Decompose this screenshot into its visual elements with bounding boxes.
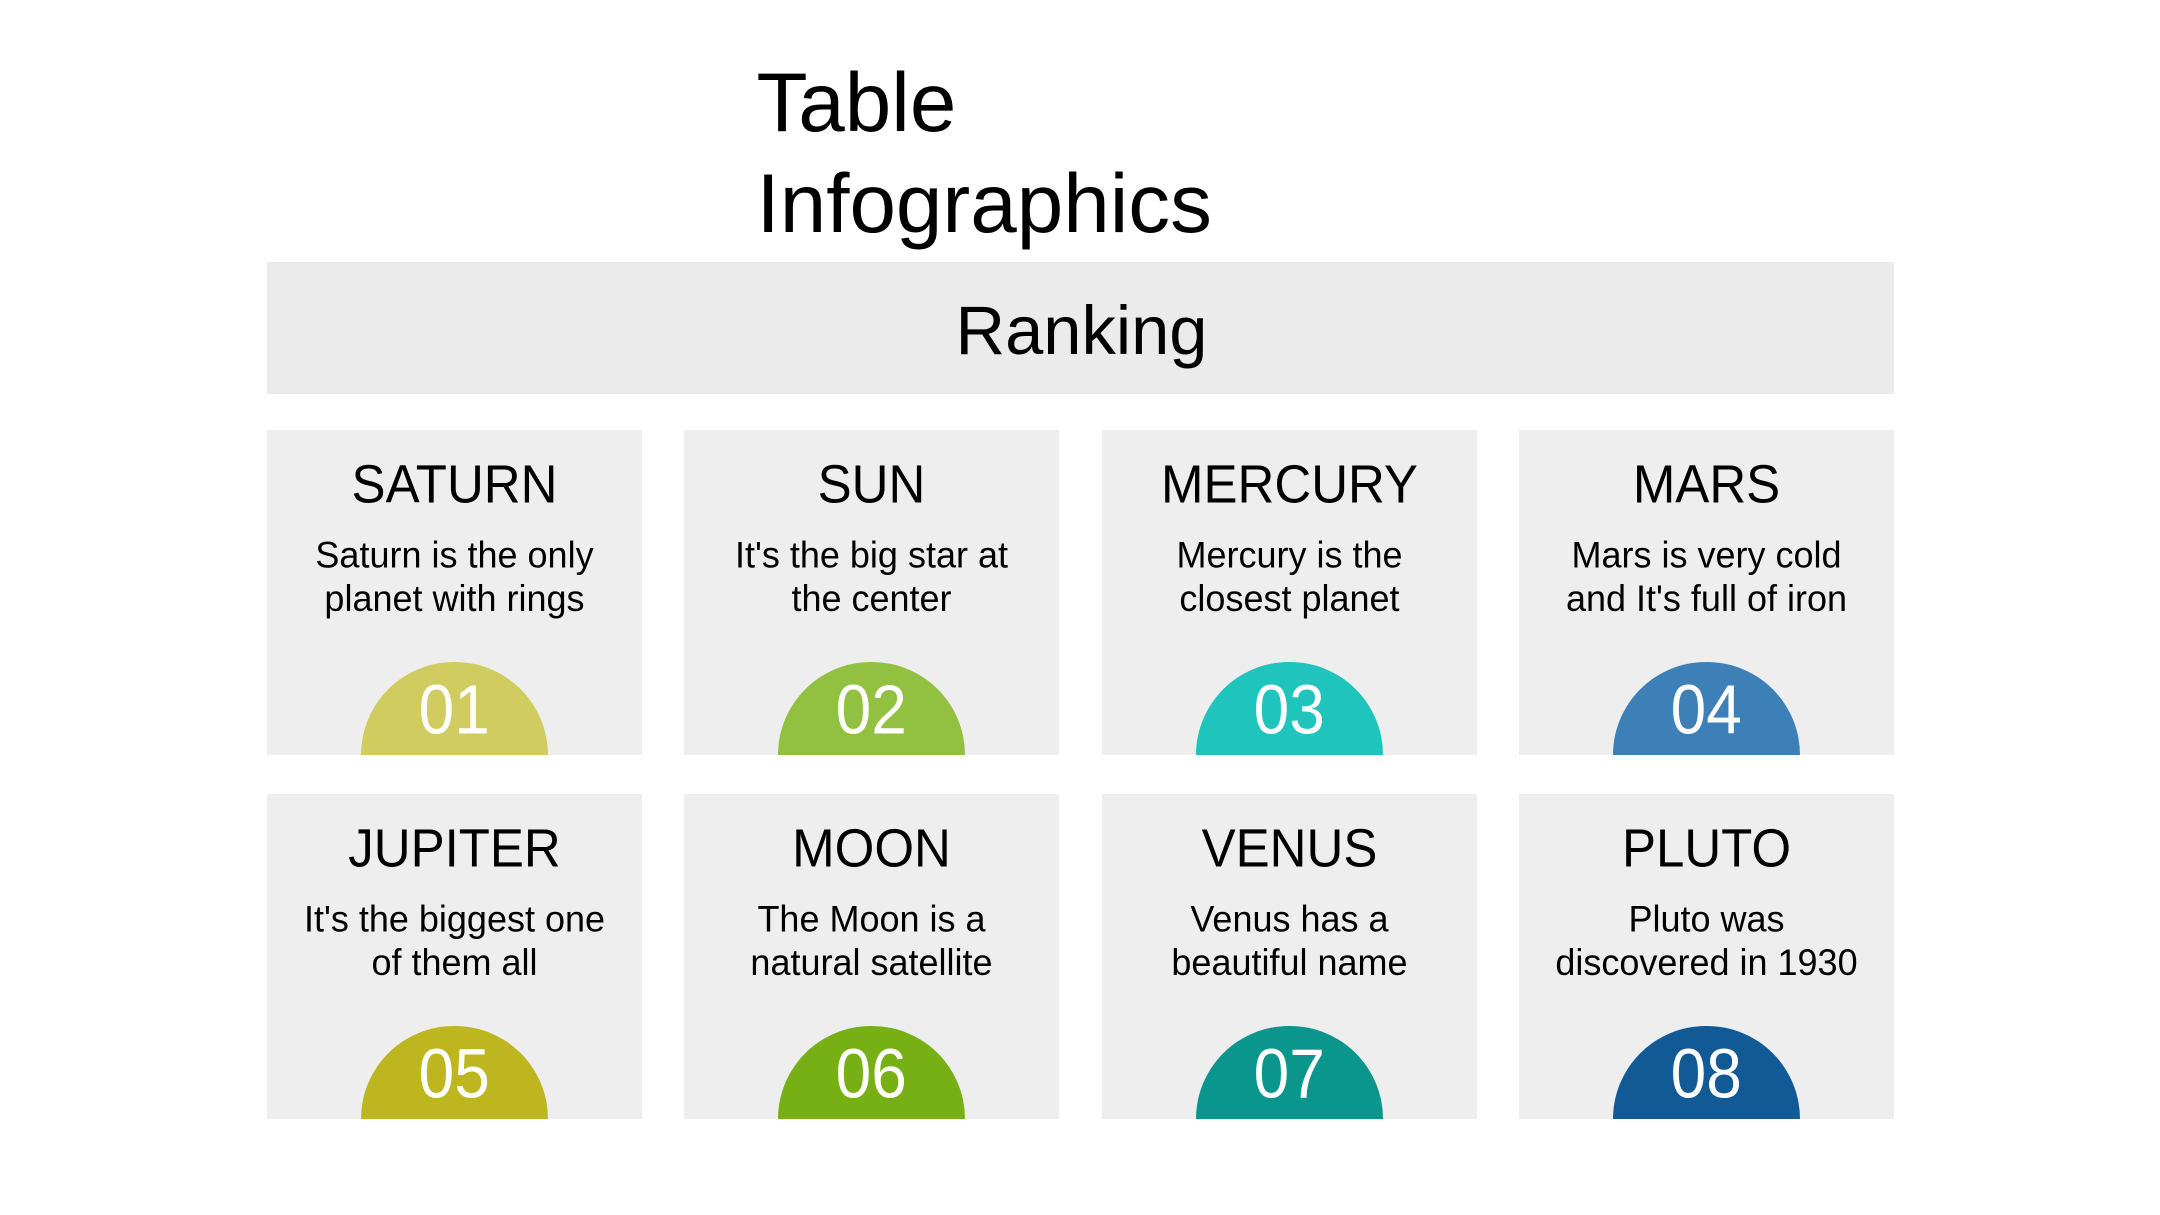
- panel: Pluto: PLUTO: [1622, 818, 1791, 878]
- panel: Venus: 07: [1254, 1035, 1325, 1113]
- panel: Jupiter: 05: [419, 1035, 490, 1113]
- banner: Ranking: Ranking: [955, 292, 1208, 368]
- title: [756, 55, 1212, 250]
- panel: Sun: SUN: [818, 454, 925, 514]
- panel: Jupiter: of them all: [371, 941, 538, 983]
- panel: Venus: beautiful name: [1171, 941, 1408, 983]
- title: Table: [756, 55, 956, 149]
- title: Infographics: [756, 156, 1212, 250]
- panel: Mercury: 03: [1254, 671, 1325, 749]
- panel: Moon: natural satellite: [750, 941, 993, 983]
- panel: Mercury: Mercury is the: [1176, 533, 1403, 576]
- panel: Pluto: discovered in 1930: [1555, 941, 1858, 983]
- panel: Venus: Venus has a: [1190, 897, 1389, 940]
- panel: Mercury: [1102, 430, 1477, 755]
- panel: Moon: MOON: [792, 818, 951, 878]
- panel: Pluto: 08: [1671, 1035, 1742, 1113]
- panel: Mars: MARS: [1633, 454, 1780, 514]
- panel: Moon: The Moon is a: [757, 897, 986, 940]
- panel: Saturn: planet with rings: [324, 577, 585, 619]
- panel: Moon: [684, 794, 1059, 1119]
- panel: Saturn: Saturn is the only: [315, 533, 594, 576]
- panel: Venus: VENUS: [1202, 818, 1377, 878]
- panel: Mercury: closest planet: [1179, 577, 1400, 619]
- panel: Mars: and It's full of iron: [1566, 577, 1847, 619]
- banner: Ranking: [267, 262, 1894, 394]
- panel: Jupiter: JUPITER: [348, 818, 561, 878]
- panel: Sun: It's the big star at: [735, 533, 1008, 576]
- panel: Sun: 02: [836, 671, 907, 749]
- panel: Mercury: MERCURY: [1161, 454, 1418, 514]
- panel: Jupiter: It's the biggest one: [304, 897, 605, 940]
- panel: Pluto: [1519, 794, 1894, 1119]
- panel: Moon: 06: [836, 1035, 907, 1113]
- panel: Mars: [1519, 430, 1894, 755]
- panel: Jupiter: [267, 794, 642, 1119]
- panel: Sun: the center: [791, 577, 952, 619]
- panel: Sun: [684, 430, 1059, 755]
- panel: Mars: Mars is very cold: [1571, 533, 1842, 576]
- panel: Pluto: Pluto was: [1628, 897, 1785, 940]
- panel: Saturn: [267, 430, 642, 755]
- panel: Saturn: 01: [419, 671, 490, 749]
- panel: Venus: [1102, 794, 1477, 1119]
- panel: Mars: 04: [1671, 671, 1742, 749]
- panel: Saturn: SATURN: [352, 454, 557, 514]
